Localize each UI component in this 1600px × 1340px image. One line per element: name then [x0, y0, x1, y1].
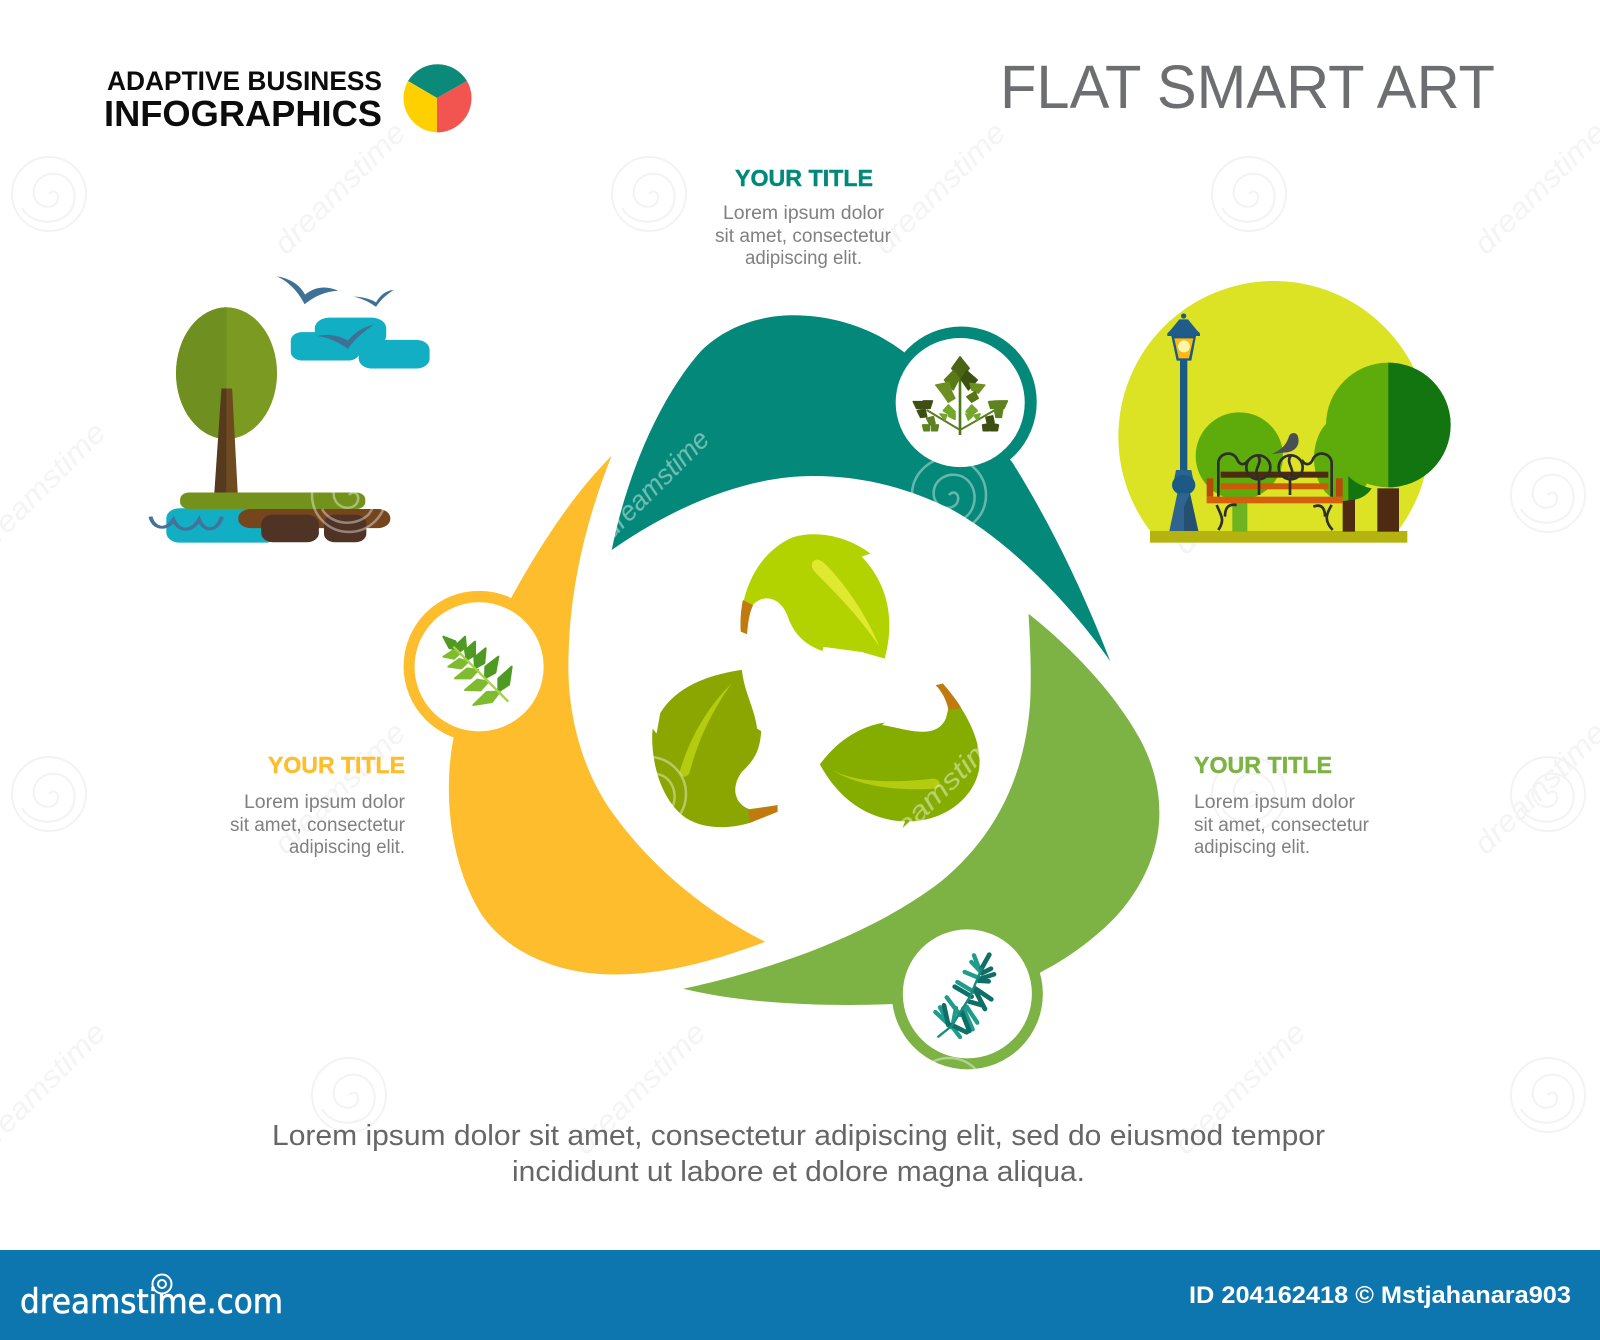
- bottom description: [272, 1120, 1325, 1188]
- main title: FLAT SMART ART: [1000, 53, 1495, 121]
- text block: right: YOUR TITLE: [1194, 752, 1332, 778]
- segment: teal: [612, 315, 1110, 661]
- icon: ivy leaf: [913, 357, 1007, 435]
- text: dreamstime: [568, 1016, 713, 1161]
- bird on bench: [1272, 433, 1299, 454]
- illustration: tree, lake and birds: [151, 276, 430, 543]
- bottom description: Lorem ipsum dolor sit amet, consectetur adipiscing elit, sed do eiusmod tempor: [272, 1120, 1325, 1152]
- text block: top: sit amet, consectetur: [715, 226, 892, 247]
- logo heading: [104, 66, 382, 134]
- center leaf: green: [820, 684, 980, 828]
- footer band: [0, 1250, 1600, 1340]
- text: dreamstime: [1468, 116, 1600, 261]
- footer image id: ID 204162418 © Mstjahanara903: [1189, 1282, 1571, 1309]
- text block: left: [230, 752, 406, 858]
- text block: right: [1194, 752, 1370, 858]
- badge: yellow disc: [415, 602, 544, 731]
- segment: yellow: [404, 456, 765, 974]
- segment: green: [683, 614, 1159, 1069]
- text block: right: sit amet, consectetur: [1194, 815, 1370, 836]
- logo heading: ADAPTIVE BUSINESS: [107, 66, 382, 96]
- street lamp: [1167, 313, 1200, 531]
- text block: right: adipiscing elit.: [1194, 837, 1310, 858]
- back tree: [1314, 416, 1373, 532]
- badge: green disc: [903, 929, 1032, 1058]
- text: dreamstime: [268, 716, 413, 861]
- text block: right: Lorem ipsum dolor: [1194, 792, 1356, 813]
- text: dreamstime: [1168, 416, 1313, 561]
- icon: fern: [443, 637, 512, 705]
- icon: logo pie: [403, 64, 471, 132]
- text: dreamstime: [868, 116, 1013, 261]
- small tree: [1196, 412, 1283, 532]
- diagram: circular cycle: [404, 315, 1159, 1069]
- badge: teal disc: [896, 338, 1025, 467]
- text block: top: adipiscing elit.: [745, 248, 862, 269]
- center leaf: olive: [652, 670, 778, 827]
- text: dreamstime: [1468, 716, 1600, 861]
- big tree: [1326, 363, 1451, 532]
- text block: left: adipiscing elit.: [289, 837, 405, 858]
- illustration: park with lamp, bench and trees: [1118, 281, 1451, 543]
- text block: left: sit amet, consectetur: [230, 815, 406, 836]
- text: dreamstime: [268, 116, 413, 261]
- bottom description: incididunt ut labore et dolore magna aliqua.: [512, 1156, 1085, 1188]
- text: dreamstime: [867, 719, 1011, 862]
- text: dreamstime: [1168, 1016, 1313, 1161]
- icon: teal sprig: [935, 955, 994, 1037]
- center leaf: light: [741, 534, 889, 659]
- text block: left: Lorem ipsum dolor: [244, 792, 406, 813]
- text: dreamstime: [594, 423, 715, 544]
- text block: left: YOUR TITLE: [268, 752, 405, 778]
- logo heading: INFOGRAPHICS: [104, 93, 382, 134]
- bench: [1207, 454, 1343, 530]
- text block: top: YOUR TITLE: [735, 165, 873, 191]
- footer brand: dreamstime.com: [20, 1282, 283, 1322]
- text block: top: Lorem ipsum dolor: [723, 203, 885, 224]
- text block: top: [715, 165, 892, 269]
